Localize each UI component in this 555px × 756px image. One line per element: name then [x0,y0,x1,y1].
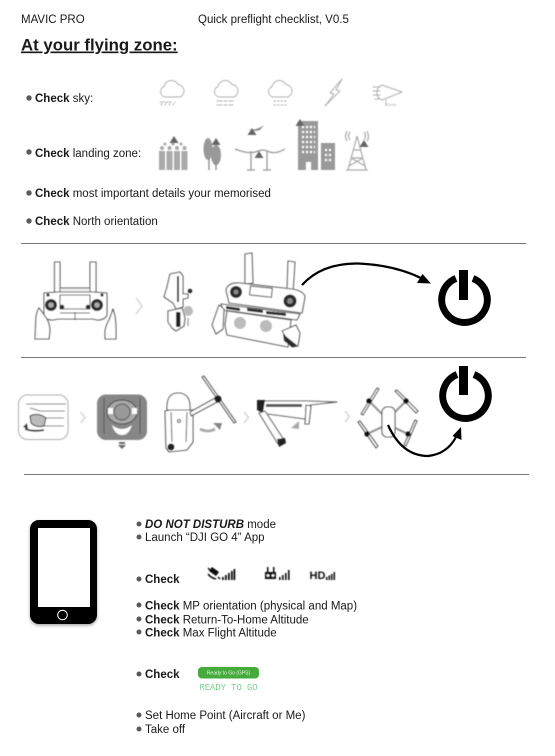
remote side view [164,272,193,331]
folded drone with arm opening [165,376,236,452]
take off item: Take off [145,724,186,736]
check details item: Check most important details your memorised [35,188,271,200]
chevron [345,411,350,422]
chevron [244,412,248,423]
chevron [136,298,142,314]
remote with phone holder [212,253,305,347]
icon: drizzle cloud [269,80,292,105]
unfolded drone side view [257,400,337,447]
check MP orientation item: Check MP orientation (physical and Map) [145,600,357,612]
check sky item: Check sky: [35,93,93,105]
arrow: drone to power [388,425,462,456]
icon: remote signal [265,567,290,580]
check north item: Check North orientation [35,216,158,228]
icon: lightning [325,79,342,106]
header: product name: MAVIC PRO [21,14,85,26]
icon: trees [204,138,221,170]
check landing zone item: Check landing zone: [35,148,141,160]
chevron [80,412,85,423]
icon: HD signal: HD [310,570,325,582]
icon: wind: ≥10m/s [385,103,397,107]
icon: GPS signal [208,567,235,580]
icon: power lines and plane [235,125,285,170]
do not disturb item: DO NOT DISTURB mode [145,519,276,531]
check ready item: Check [145,669,180,681]
icon: power button remote [442,270,487,322]
check return to home item: Check Return-To-Home Altitude [145,614,309,626]
icon: radio tower [346,131,368,170]
ready to go display text: READY TO GO [200,683,258,693]
icons: sky conditions [160,79,402,107]
gimbal cover panel [97,394,147,449]
remote front view [35,262,116,339]
icon: power button drone [443,366,488,418]
heading: at your flying zone: At your flying zone: [21,36,178,54]
header: document title: Quick preflight checklist, V0.5 [198,14,349,26]
icon: rain cloud [160,80,184,105]
green status badge: Ready to Go (GPS) [207,670,251,676]
illustration: unfolding the remote [35,253,305,347]
drone top view [358,388,418,448]
icon: buildings [296,119,335,170]
set home point item: Set Home Point (Aircraft or Me) [145,710,306,722]
icon: smartphone [30,520,97,624]
check max altitude item: Check Max Flight Altitude [145,628,277,640]
illustration: drone preparation [18,376,418,452]
launch app item: Launch “DJI GO 4” App [145,532,265,544]
arrow: remote to power [302,263,431,285]
icon: wind [373,85,402,107]
status: ready to go [198,667,259,693]
icons: landing zone hazards [159,119,368,170]
icon: crowd [159,136,188,170]
check signals item: Check [145,574,180,586]
icon: snow cloud [215,80,238,105]
gimbal clamp panel [18,395,68,440]
icons: signal strength [208,567,335,582]
